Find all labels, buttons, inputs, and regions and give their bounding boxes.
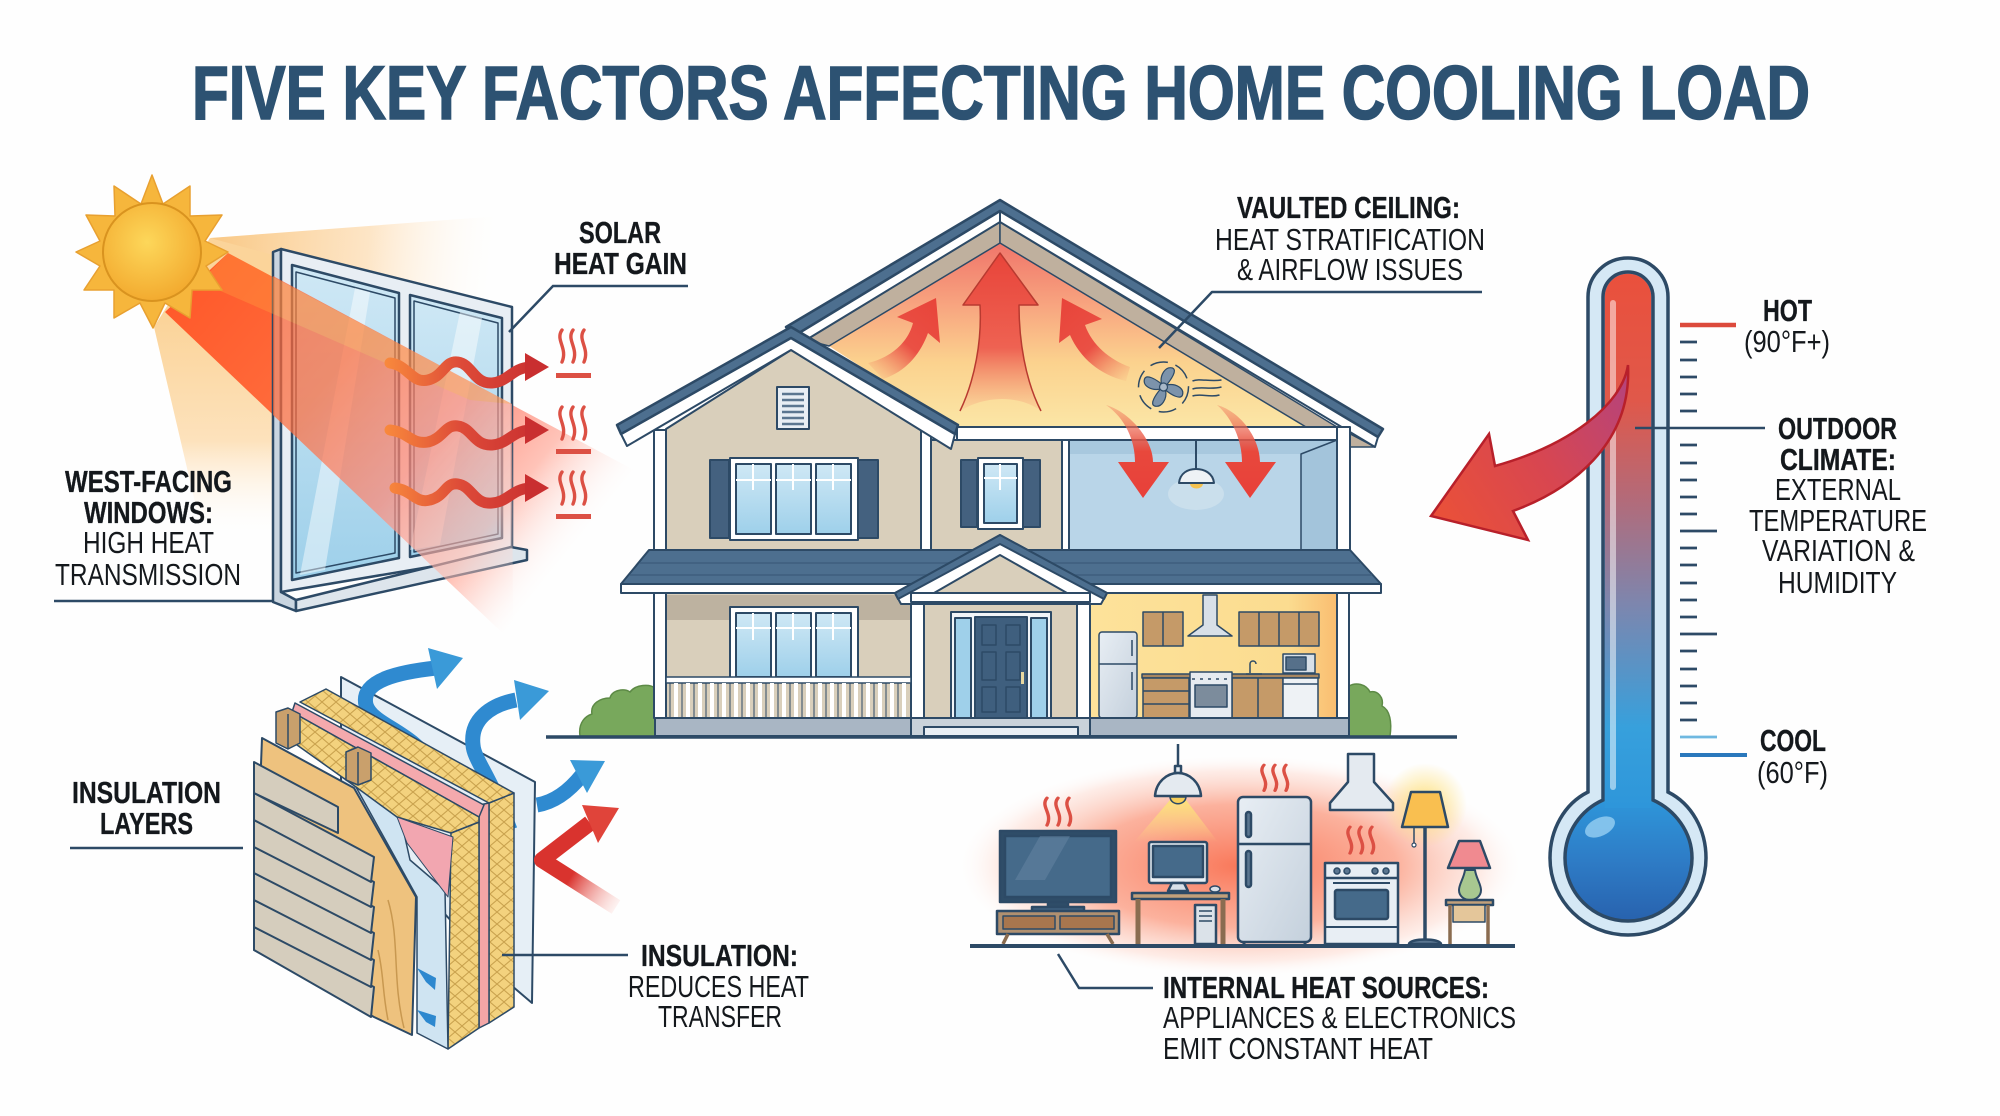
vapour wrap bbox=[356, 787, 448, 1049]
upper left window bbox=[710, 458, 878, 540]
icon: pendant light bbox=[1155, 744, 1201, 804]
panel: house cross-section bbox=[546, 190, 1485, 737]
label: hot: (90°F+) bbox=[1744, 324, 1830, 359]
icon: table lamp bbox=[1446, 841, 1493, 944]
leader: west-facing windows bbox=[54, 600, 273, 602]
label: outdoor climate: HUMIDITY bbox=[1778, 565, 1897, 600]
insulation batt right face bbox=[489, 793, 514, 1023]
label: outdoor climate: EXTERNAL bbox=[1775, 472, 1901, 507]
label: vaulted ceiling: & AIRFLOW ISSUES bbox=[1237, 252, 1463, 287]
ceiling beam and posts bbox=[957, 427, 1350, 550]
falling air arrows bbox=[1106, 405, 1276, 498]
gable vent bbox=[777, 387, 809, 429]
label: vaulted ceiling: VAULTED CEILING: bbox=[1237, 190, 1460, 225]
heat squiggles bbox=[556, 330, 591, 519]
label: insulation layers bbox=[72, 775, 221, 841]
siding slats bbox=[254, 762, 374, 1017]
label: internal heat sources bbox=[1163, 970, 1516, 1066]
label: internal heat sources: EMIT CONSTANT HEAT bbox=[1163, 1031, 1433, 1066]
front gable trim bbox=[621, 338, 955, 550]
label: hot bbox=[1744, 293, 1830, 359]
thermometer body bbox=[1550, 258, 1706, 935]
small inner blue arrows bbox=[417, 968, 436, 1027]
big heat arrow bbox=[1431, 365, 1628, 540]
tv heat squiggle bbox=[1045, 798, 1071, 825]
front gable wall bbox=[666, 350, 921, 550]
base and steps bbox=[655, 718, 1349, 736]
porch railing bbox=[666, 677, 911, 718]
label: internal heat sources: APPLIANCES & ELECTRONICS bbox=[1163, 1000, 1516, 1035]
label: solar heat gain bbox=[554, 215, 687, 281]
label: outdoor climate: VARIATION & bbox=[1762, 533, 1915, 568]
stove heat squiggle bbox=[1348, 827, 1374, 853]
front door bbox=[951, 612, 1051, 718]
label: hot: HOT bbox=[1763, 293, 1812, 328]
ground floor posts bbox=[654, 592, 1349, 718]
label: west-facing windows: HIGH HEAT bbox=[83, 525, 214, 560]
interior drywall bbox=[341, 677, 535, 1003]
panel: thermometer bbox=[1431, 258, 1927, 935]
icon: television bbox=[997, 831, 1119, 944]
label: outdoor climate: TEMPERATURE bbox=[1749, 503, 1927, 538]
leader: insulation bbox=[502, 954, 628, 956]
label: solar heat gain: SOLAR bbox=[579, 215, 661, 250]
escaping blue arrow three bbox=[537, 760, 605, 805]
label: outdoor climate: CLIMATE: bbox=[1780, 442, 1896, 477]
window frame bbox=[273, 249, 527, 611]
red incoming arrow bbox=[542, 805, 619, 907]
upper wall middle bbox=[931, 440, 1062, 550]
heat glow bbox=[955, 754, 1525, 978]
bushes bbox=[580, 684, 1391, 736]
leader: insulation layers bbox=[70, 847, 243, 849]
top yellow band bbox=[300, 689, 514, 803]
kitchen bbox=[1099, 595, 1319, 718]
glass reflections bbox=[300, 288, 482, 575]
rising hot air arrows bbox=[868, 253, 1130, 411]
label: west-facing windows bbox=[55, 464, 241, 592]
beam passing through glass bbox=[200, 253, 513, 643]
label: west-facing windows: WEST-FACING bbox=[65, 464, 232, 499]
panel: internal heat sources bbox=[955, 744, 1525, 1066]
upper middle window bbox=[961, 458, 1040, 529]
label: insulation bbox=[628, 938, 809, 1034]
temperature ticks bbox=[1680, 325, 1747, 755]
icon: refrigerator bbox=[1238, 797, 1311, 945]
sheathing bbox=[254, 738, 416, 1035]
leader: vaulted ceiling bbox=[1159, 292, 1482, 348]
label: insulation: TRANSFER bbox=[658, 999, 782, 1034]
leader: solar heat gain bbox=[509, 286, 688, 332]
leader: internal heat sources bbox=[1058, 954, 1153, 988]
label: vaulted ceiling: HEAT STRATIFICATION bbox=[1215, 222, 1485, 257]
front gable roof bbox=[617, 327, 958, 434]
ground line bbox=[546, 735, 1457, 739]
main roof fascia bbox=[794, 211, 1378, 447]
exposed pink batt bbox=[397, 817, 453, 897]
panel: solar heat gain window bbox=[54, 175, 688, 643]
lower yellow band bbox=[290, 712, 479, 833]
ground floor walls bbox=[666, 593, 1337, 718]
wave arrow heads bbox=[525, 353, 549, 502]
porch roof bbox=[621, 550, 1381, 593]
label: insulation layers: INSULATION bbox=[72, 775, 221, 810]
blue arrow one bbox=[365, 648, 463, 765]
label: insulation layers: LAYERS bbox=[100, 806, 193, 841]
label: solar heat gain: HEAT GAIN bbox=[554, 246, 687, 281]
tan ceiling band bbox=[806, 222, 1375, 447]
leader: outdoor climate bbox=[1635, 427, 1765, 429]
cut-away blue room bbox=[1069, 440, 1337, 550]
main roof bbox=[786, 200, 1383, 437]
pink band bbox=[292, 703, 484, 817]
icon: floor lamp bbox=[1402, 792, 1448, 944]
label: cool bbox=[1757, 723, 1828, 790]
label: west-facing windows: WINDOWS: bbox=[84, 495, 213, 530]
wave heat arrows bbox=[390, 362, 530, 503]
icon: range hood bbox=[1330, 754, 1393, 810]
wood studs bbox=[276, 708, 371, 785]
icon: stove bbox=[1325, 863, 1398, 944]
label: insulation: REDUCES HEAT bbox=[628, 969, 809, 1004]
label: cool: (60°F) bbox=[1757, 755, 1828, 790]
icon: attic fan bbox=[1138, 362, 1222, 412]
label: vaulted ceiling bbox=[1215, 190, 1485, 287]
pendant lamp bbox=[1168, 440, 1224, 510]
pale sun glow bbox=[154, 216, 520, 545]
insulation batt inner face bbox=[448, 822, 479, 1049]
panel: insulation layers bbox=[70, 648, 809, 1049]
vaulted gable interior bbox=[829, 243, 1306, 427]
porch gable bbox=[895, 535, 1107, 604]
icon: sun bbox=[76, 175, 228, 328]
ground floor window bbox=[730, 607, 858, 679]
label: outdoor climate bbox=[1749, 411, 1927, 600]
icon: computer desk bbox=[1132, 842, 1229, 944]
red sun beam bbox=[165, 253, 647, 643]
label: internal heat sources: INTERNAL HEAT SOURCES: bbox=[1163, 970, 1489, 1005]
pink layer edge bbox=[479, 803, 489, 1028]
label: insulation: INSULATION: bbox=[641, 938, 798, 973]
label: outdoor climate: OUTDOOR bbox=[1778, 411, 1897, 446]
label: cool: COOL bbox=[1760, 723, 1826, 758]
blue arrow two bbox=[473, 680, 549, 830]
label: west-facing windows: TRANSMISSION bbox=[55, 557, 241, 592]
floor line bbox=[970, 944, 1515, 948]
fridge heat squiggle bbox=[1262, 765, 1288, 791]
